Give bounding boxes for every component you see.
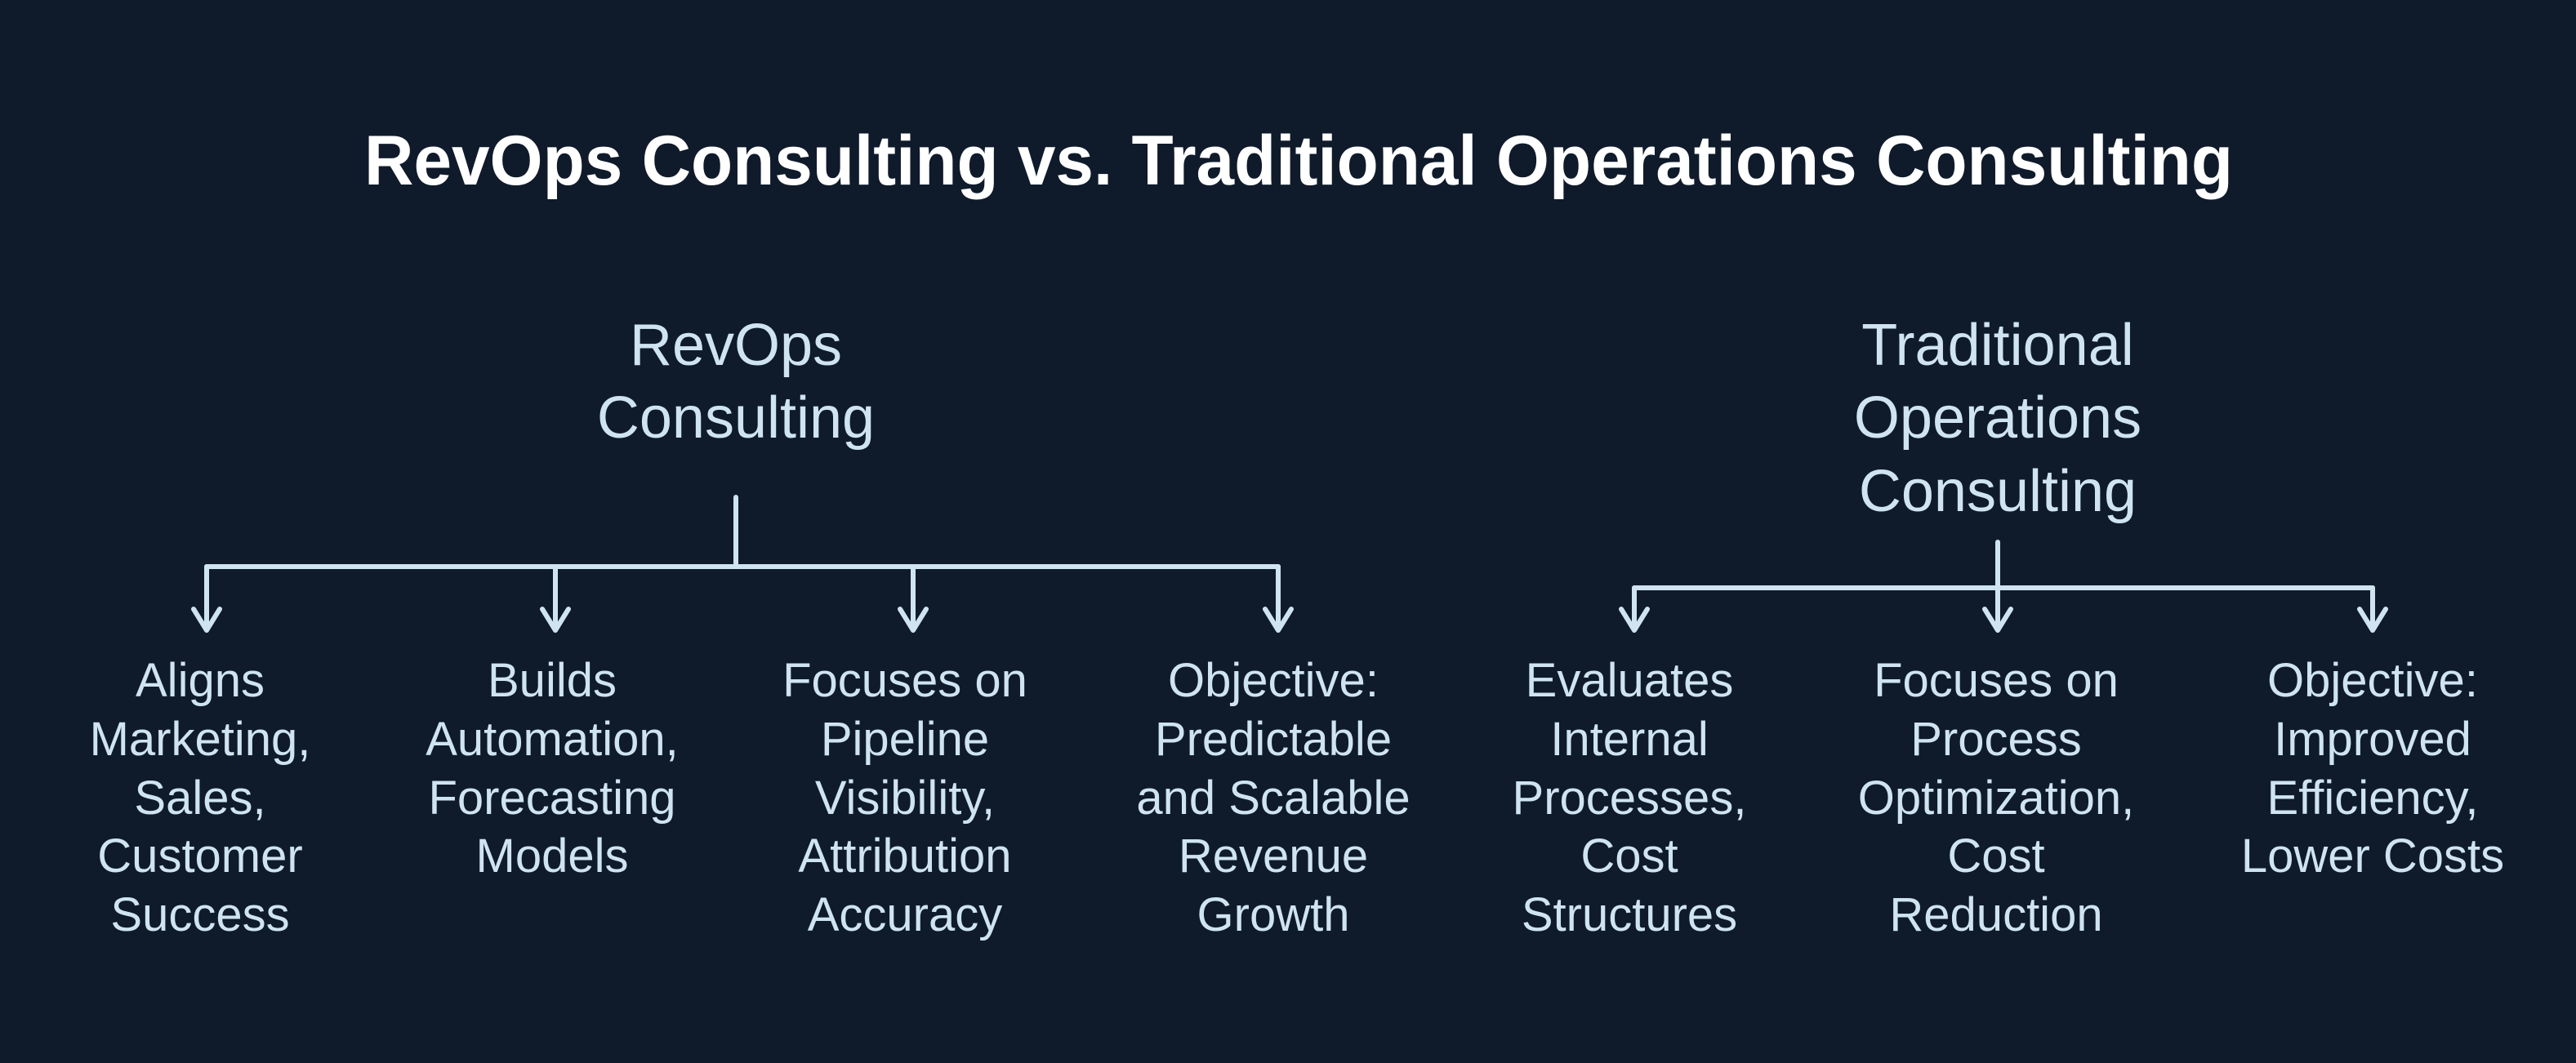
leaf: Objective Improved Efficiency: Objective: — [2267, 654, 2478, 707]
leaf: Aligns Marketing, Sales, Customer Success: Sales, — [134, 772, 266, 825]
leaf: Focuses on Process Optimization: Process — [1910, 713, 2082, 766]
leaf: Focuses on Pipeline Visibility: Visibility, — [815, 772, 995, 825]
leaf: Evaluates Internal Processes — [1513, 654, 1746, 941]
leaf: Evaluates Internal Processes: Structures — [1522, 888, 1737, 941]
heading: Traditional Operations Consulting: Operations — [1854, 385, 2141, 451]
title: RevOps Consulting vs. Traditional Operations Consulting — [364, 122, 2233, 200]
leaf: Evaluates Internal Processes: Cost — [1580, 829, 1678, 883]
leaf: Objective Predictable Revenue: Revenue — [1179, 829, 1368, 883]
heading: RevOps Consulting — [597, 313, 875, 451]
leaf: Evaluates Internal Processes: Processes, — [1513, 772, 1746, 825]
heading: Traditional Operations Consulting: Traditional — [1861, 313, 2134, 378]
leaf: Focuses on Pipeline Visibility — [782, 654, 1027, 941]
heading: RevOps Consulting: Consulting — [597, 385, 875, 451]
heading: Traditional Operations Consulting: Consulting — [1859, 459, 2137, 524]
leaf: Objective Predictable Revenue: Objective: — [1168, 654, 1379, 707]
leaf: Objective Improved Efficiency: Efficiency, — [2267, 772, 2478, 825]
leaf: Objective Improved Efficiency: Improved — [2274, 713, 2471, 766]
leaf: Focuses on Pipeline Visibility: Focuses on — [782, 654, 1027, 707]
leaf: Focuses on Process Optimization: Focuses on — [1874, 654, 2119, 707]
leaf: Focuses on Pipeline Visibility: Pipeline — [821, 713, 989, 766]
leaf: Focuses on Process Optimization — [1858, 654, 2134, 941]
leaf: Aligns Marketing, Sales, Customer Success: Customer — [97, 829, 303, 883]
tree connector: RevOps — [194, 497, 1291, 630]
leaf: Aligns Marketing, Sales, Customer Success: Marketing, — [90, 713, 310, 766]
tree connector: Traditional — [1621, 542, 2386, 630]
leaf: Objective Improved Efficiency — [2241, 654, 2504, 883]
leaf: Evaluates Internal Processes: Evaluates — [1526, 654, 1733, 707]
heading: RevOps Consulting: RevOps — [630, 313, 842, 378]
leaf: Builds Automation, Forecasting Models: Models — [476, 829, 628, 883]
leaf: Builds Automation, Forecasting Models: Builds — [488, 654, 617, 707]
heading: Traditional Operations Consulting — [1854, 313, 2141, 524]
leaf: Focuses on Process Optimization: Reduction — [1889, 888, 2103, 941]
leaf: Builds Automation, Forecasting Models: Automation, — [426, 713, 679, 766]
leaf: Focuses on Pipeline Visibility: Attribution — [798, 829, 1012, 883]
leaf: Evaluates Internal Processes: Internal — [1550, 713, 1709, 766]
leaf: Builds Automation, Forecasting Models — [426, 654, 679, 883]
leaf: Objective Predictable Revenue: Predictable — [1155, 713, 1392, 766]
leaf: Objective Predictable Revenue — [1136, 654, 1411, 941]
leaf: Focuses on Process Optimization: Cost — [1947, 829, 2045, 883]
leaf: Aligns Marketing, Sales, Customer Success — [90, 654, 310, 941]
leaf: Aligns Marketing, Sales, Customer Success: Aligns — [136, 654, 265, 707]
leaf: Aligns Marketing, Sales, Customer Success: Success — [110, 888, 290, 941]
leaf: Objective Predictable Revenue: and Scalable — [1136, 772, 1411, 825]
leaf: Builds Automation, Forecasting Models: Forecasting — [428, 772, 676, 825]
leaf: Focuses on Process Optimization: Optimization, — [1858, 772, 2134, 825]
leaf: Focuses on Pipeline Visibility: Accuracy — [808, 888, 1002, 941]
leaf: Objective Predictable Revenue: Growth — [1197, 888, 1349, 941]
leaf: Objective Improved Efficiency: Lower Costs — [2241, 829, 2504, 883]
